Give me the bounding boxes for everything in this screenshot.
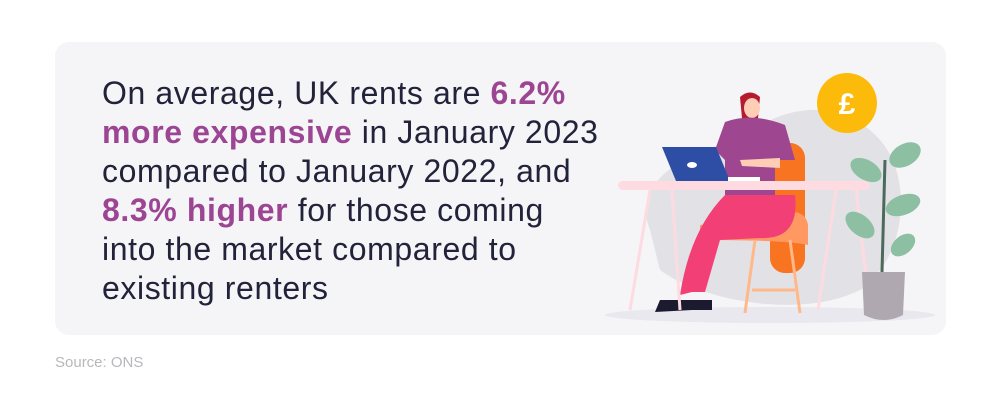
main text: into the market compared to [102, 231, 517, 267]
desk [618, 181, 870, 310]
chair [700, 143, 808, 313]
main text: compared to January 2022, and [102, 153, 571, 189]
person [655, 92, 796, 312]
coin [817, 73, 877, 133]
main text: existing renters [102, 270, 329, 306]
source note: Source: ONS [55, 354, 143, 371]
card panel [55, 42, 946, 335]
plant [841, 137, 925, 320]
coin: £ [839, 88, 856, 121]
main text: more expensive in January 2023 [102, 114, 599, 150]
laptop [662, 147, 760, 182]
main text: On average, UK rents are 6.2% [102, 75, 566, 111]
main text [102, 75, 599, 306]
main text: 8.3% higher for those coming [102, 192, 544, 228]
